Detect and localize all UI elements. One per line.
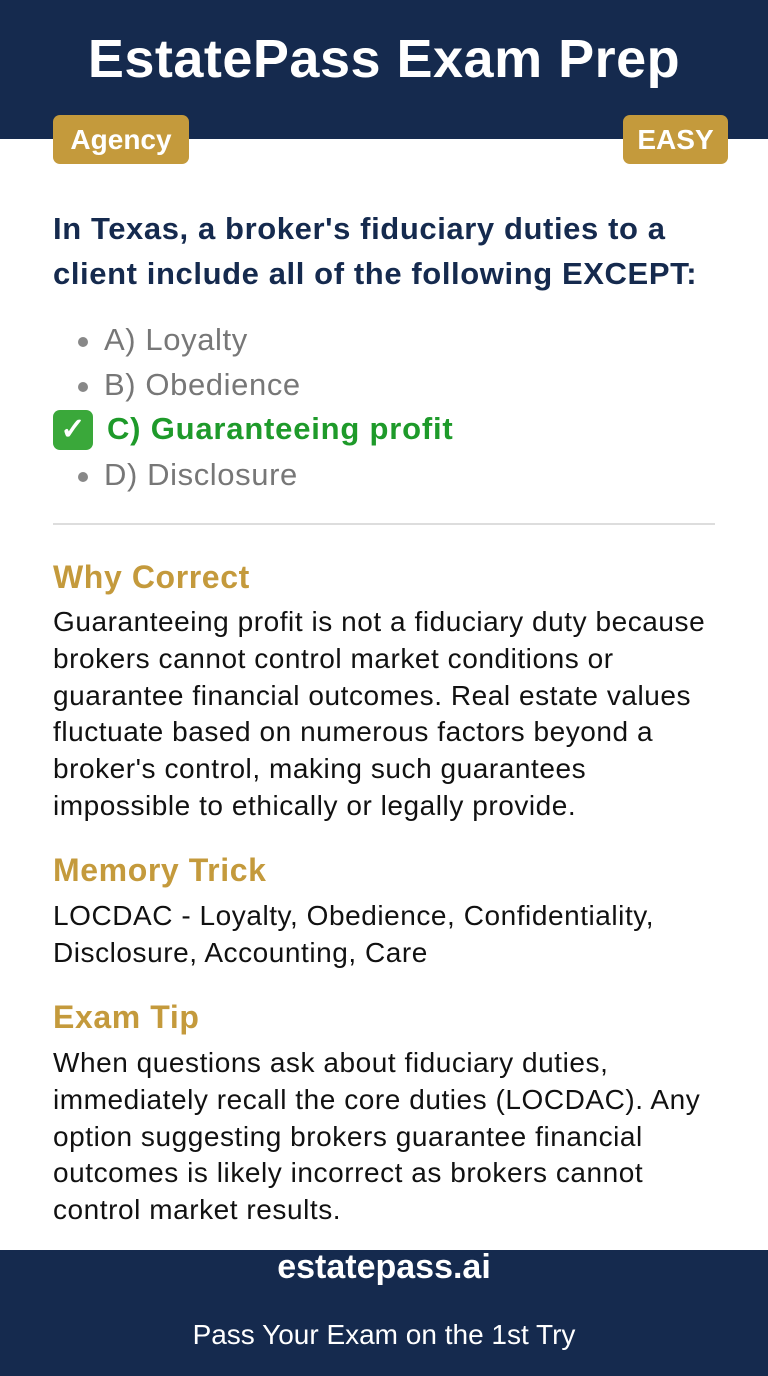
question: In Texas, a broker's fiduciary duties to a <box>53 211 666 246</box>
icon: check: ✓ <box>60 413 86 446</box>
text: why correct: impossible to ethically or legally provide. <box>53 790 576 821</box>
text: exam tip: control market results. <box>53 1194 341 1225</box>
question: client include all of the following EXCEPT: <box>53 256 697 291</box>
text: memory trick: LOCDAC - Loyalty, Obedience, Confidentiality, <box>53 900 654 931</box>
badge: category <box>53 115 189 164</box>
text: memory trick: Disclosure, Accounting, Care <box>53 937 428 968</box>
text: why correct: fluctuate based on numerous factors beyond a <box>53 716 653 747</box>
option B: B) Obedience <box>104 367 301 402</box>
title: EstatePass Exam Prep <box>88 29 680 89</box>
text: exam tip: immediately recall the core duties (LOCDAC). Any <box>53 1084 700 1115</box>
option C correct <box>53 410 454 450</box>
header bar <box>0 0 768 139</box>
badge: difficulty <box>623 115 728 164</box>
text: memory trick <box>53 900 654 968</box>
badge: category: Agency <box>70 124 172 155</box>
text: why correct: guarantee financial outcomes. Real estate values <box>53 680 691 711</box>
text: exam tip: outcomes is likely incorrect as brokers cannot <box>53 1157 643 1188</box>
heading: memory trick: Memory Trick <box>53 852 267 888</box>
footer <box>0 1250 768 1376</box>
badge: difficulty: EASY <box>637 124 714 155</box>
text: why correct: brokers cannot control market conditions or <box>53 643 614 674</box>
question <box>53 211 697 291</box>
footer site: estatepass.ai <box>277 1248 491 1286</box>
option A: A) Loyalty <box>104 322 248 357</box>
text: exam tip: When questions ask about fiduciary duties, <box>53 1047 608 1078</box>
text: exam tip: option suggesting brokers guarantee financial <box>53 1121 643 1152</box>
heading: exam tip: Exam Tip <box>53 999 200 1035</box>
text: why correct: broker's control, making such guarantees <box>53 753 586 784</box>
icon: check <box>53 410 93 450</box>
footer tagline: Pass Your Exam on the 1st Try <box>193 1319 575 1350</box>
text: why correct: Guaranteeing profit is not a fiduciary duty because <box>53 606 705 637</box>
option D: D) Disclosure <box>104 457 298 492</box>
text: why correct <box>53 606 705 821</box>
correct answer text: C) Guaranteeing profit <box>107 411 454 446</box>
text: exam tip <box>53 1047 700 1225</box>
heading: why correct: Why Correct <box>53 559 250 595</box>
